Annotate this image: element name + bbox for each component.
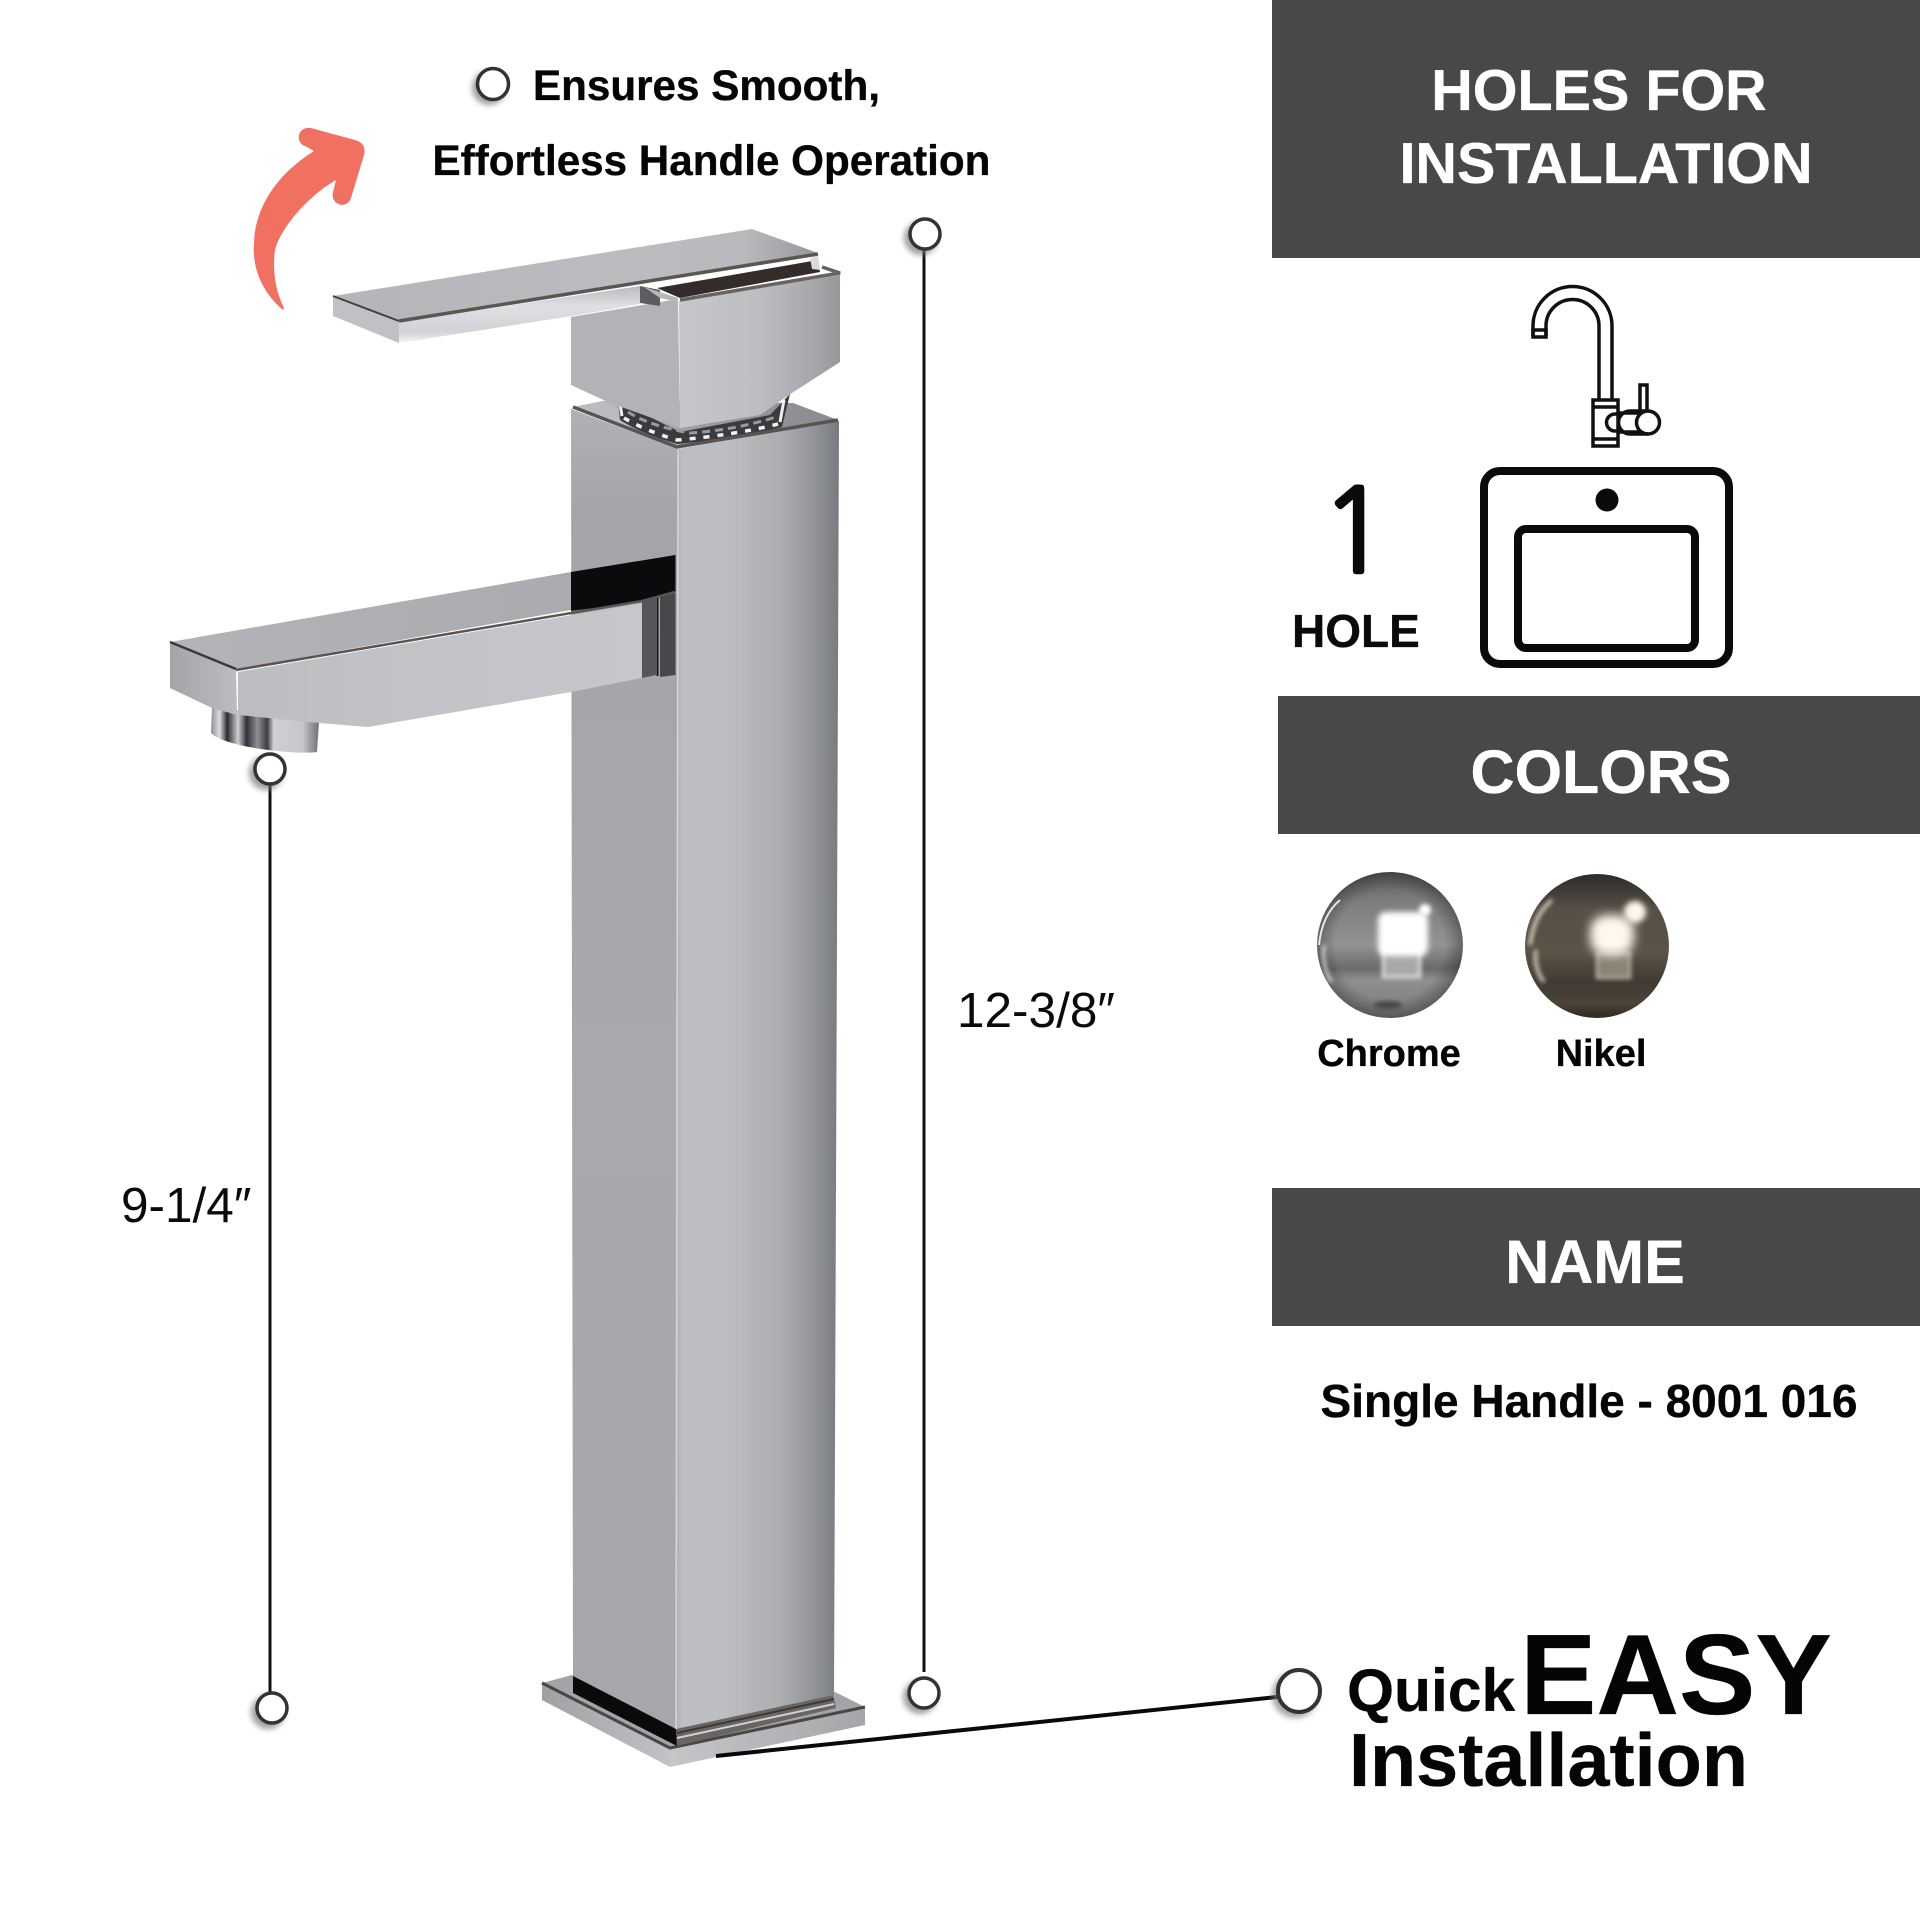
callout: handle operation <box>432 62 990 184</box>
text: 1 hole: 1 <box>1320 474 1390 589</box>
swatch: chrome <box>1317 872 1463 1075</box>
pillar top edge band <box>573 407 838 447</box>
panel: holes for installation header: INSTALLATION <box>1399 132 1813 196</box>
panel: name header <box>1272 1188 1920 1326</box>
swatch: nickel: Nikel <box>1556 1033 1646 1075</box>
spout <box>170 555 676 727</box>
dimension: 12-3/8 inch <box>903 219 1115 1714</box>
icon: curved coral arrow <box>254 128 365 310</box>
text: 1 hole <box>1292 474 1420 657</box>
swatch: nickel <box>1525 874 1669 1075</box>
text: product name: Single Handle - 8001 016 <box>1321 1375 1857 1427</box>
panel: colors header <box>1278 696 1920 834</box>
callout: quick easy installation <box>716 1611 1832 1803</box>
faucet base plate <box>542 1675 865 1767</box>
callout: handle operation: Ensures Smooth, <box>533 62 880 109</box>
panel: holes for installation header: HOLES FOR <box>1431 59 1767 123</box>
panel: holes for installation header <box>1272 0 1920 258</box>
pillar top cap <box>573 401 838 447</box>
dimension: 9-1/4 inch: 9-1/4″ <box>121 1178 251 1233</box>
icon: sink with one hole <box>1484 471 1729 664</box>
faucet product illustration <box>170 229 865 1767</box>
dimension: 12-3/8 inch: 12-3/8″ <box>957 983 1115 1038</box>
callout: quick easy installation: EASY <box>1520 1611 1832 1739</box>
callout: handle operation: Effortless Handle Operation <box>432 137 990 184</box>
faucet pillar <box>571 409 839 1729</box>
icon: gooseneck faucet <box>1533 286 1660 446</box>
callout: quick easy installation: Quick <box>1347 1656 1515 1724</box>
valve ring under handle <box>618 394 790 444</box>
handle lever <box>333 229 818 343</box>
panel: name header: NAME <box>1505 1228 1685 1296</box>
handle cube body <box>571 256 840 428</box>
swatch: chrome: Chrome <box>1317 1033 1461 1075</box>
dimension: 9-1/4 inch <box>121 754 287 1729</box>
spout aerator <box>211 706 319 753</box>
callout: quick easy installation: Installation <box>1349 1719 1748 1803</box>
text: 1 hole: HOLE <box>1292 605 1420 657</box>
panel: colors header: COLORS <box>1471 738 1731 806</box>
